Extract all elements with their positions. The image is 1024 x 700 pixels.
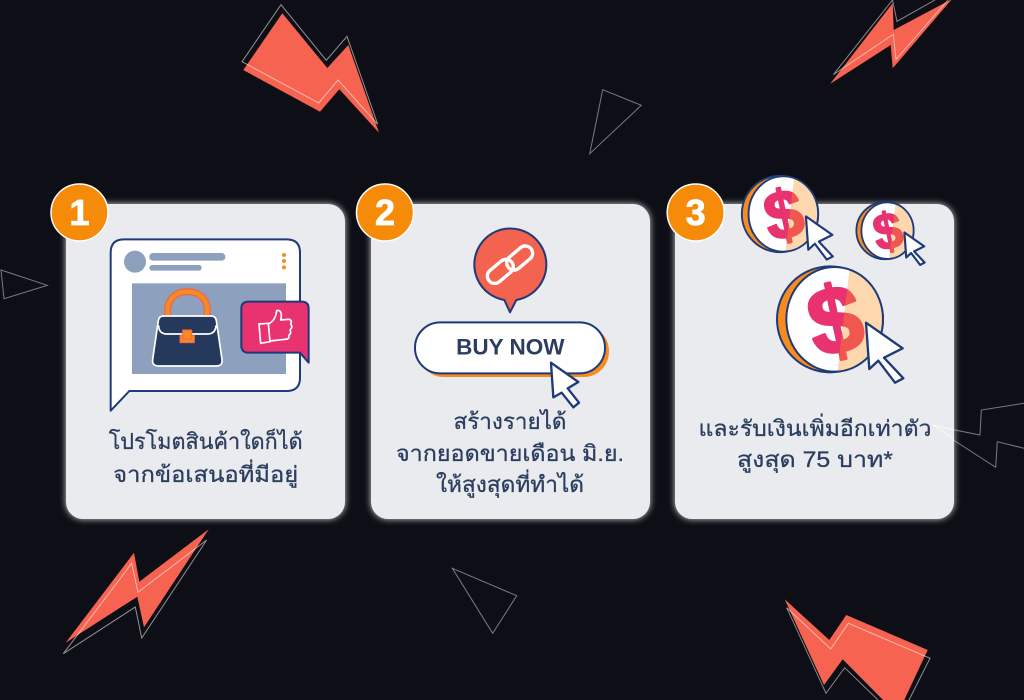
badge: number 3 (667, 184, 724, 241)
card background 3 (675, 204, 954, 519)
text: step 2 description: ให้สูงสุดที่ทำได้ (436, 469, 584, 498)
button: buy now (415, 322, 609, 377)
badge: number 1: 1 (69, 192, 90, 233)
dollar overlap small: $ (868, 200, 908, 262)
text: step 2 description (396, 409, 624, 498)
lightning outline: bottom right lower edge (787, 608, 878, 700)
coin face outline (786, 267, 883, 372)
panel: step 3 (675, 174, 954, 519)
card background 1 (66, 204, 345, 519)
icon: medium coin with cursor (742, 174, 833, 260)
text: step 1 description: จากข้อเสนอที่มีอยู่ (113, 459, 298, 488)
icon: large coin with cursor: $ (798, 264, 872, 378)
icon: cursor (551, 363, 579, 407)
icon: small coin with cursor: $ (868, 200, 908, 262)
faint outline over card (933, 425, 954, 439)
triangle outline: left edge (1, 270, 47, 299)
badge: number 2: 2 (375, 192, 395, 233)
coin face outline medium (749, 176, 818, 252)
lightning bolt: top centre (242, 5, 379, 133)
icon: small coin with cursor (856, 200, 925, 265)
text: step 2 description: จากยอดขายเดือน มิ.ย. (396, 441, 624, 466)
card background 2 (371, 204, 650, 519)
text: step 3 description: และรับเงินเพิ่มอีกเท่าตัว (698, 413, 932, 441)
badge: number 3: 3 (686, 192, 706, 233)
text: step 3 description: สูงสุด 75 บาท* (737, 447, 893, 473)
text: step 2 description: สร้างรายได้ (454, 409, 566, 434)
icon: large coin with cursor (777, 264, 903, 383)
triangle outline: top centre (590, 90, 641, 154)
icon: thumbs up bubble (241, 302, 309, 363)
dollar overlap on peach: $ (798, 264, 872, 378)
icon: medium coin with cursor: $ (757, 174, 810, 256)
badge: number 2 (356, 184, 414, 241)
lightning bolt: bottom right (785, 599, 930, 700)
lightning bolt: top right (830, 0, 952, 84)
icon: link pin (474, 229, 546, 312)
lightning outline: right edge (930, 403, 1024, 467)
badge: number 1 (51, 184, 108, 241)
button: buy now: BUY NOW (456, 334, 565, 359)
panel: step 2 (371, 204, 650, 519)
panel: step 1 (66, 204, 345, 519)
coin face outline small (861, 202, 914, 259)
dollar overlap medium: $ (757, 174, 810, 256)
triangle outline: bottom centre (452, 568, 517, 633)
text: step 1 description (109, 427, 303, 488)
text: step 1 description: โปรโมตสินค้าใดก็ได้ (109, 427, 303, 454)
icon: social post speech bubble (111, 239, 309, 411)
icon: handbag (153, 292, 222, 366)
text: step 3 description (698, 413, 932, 473)
lightning bolt: bottom left (63, 529, 209, 654)
